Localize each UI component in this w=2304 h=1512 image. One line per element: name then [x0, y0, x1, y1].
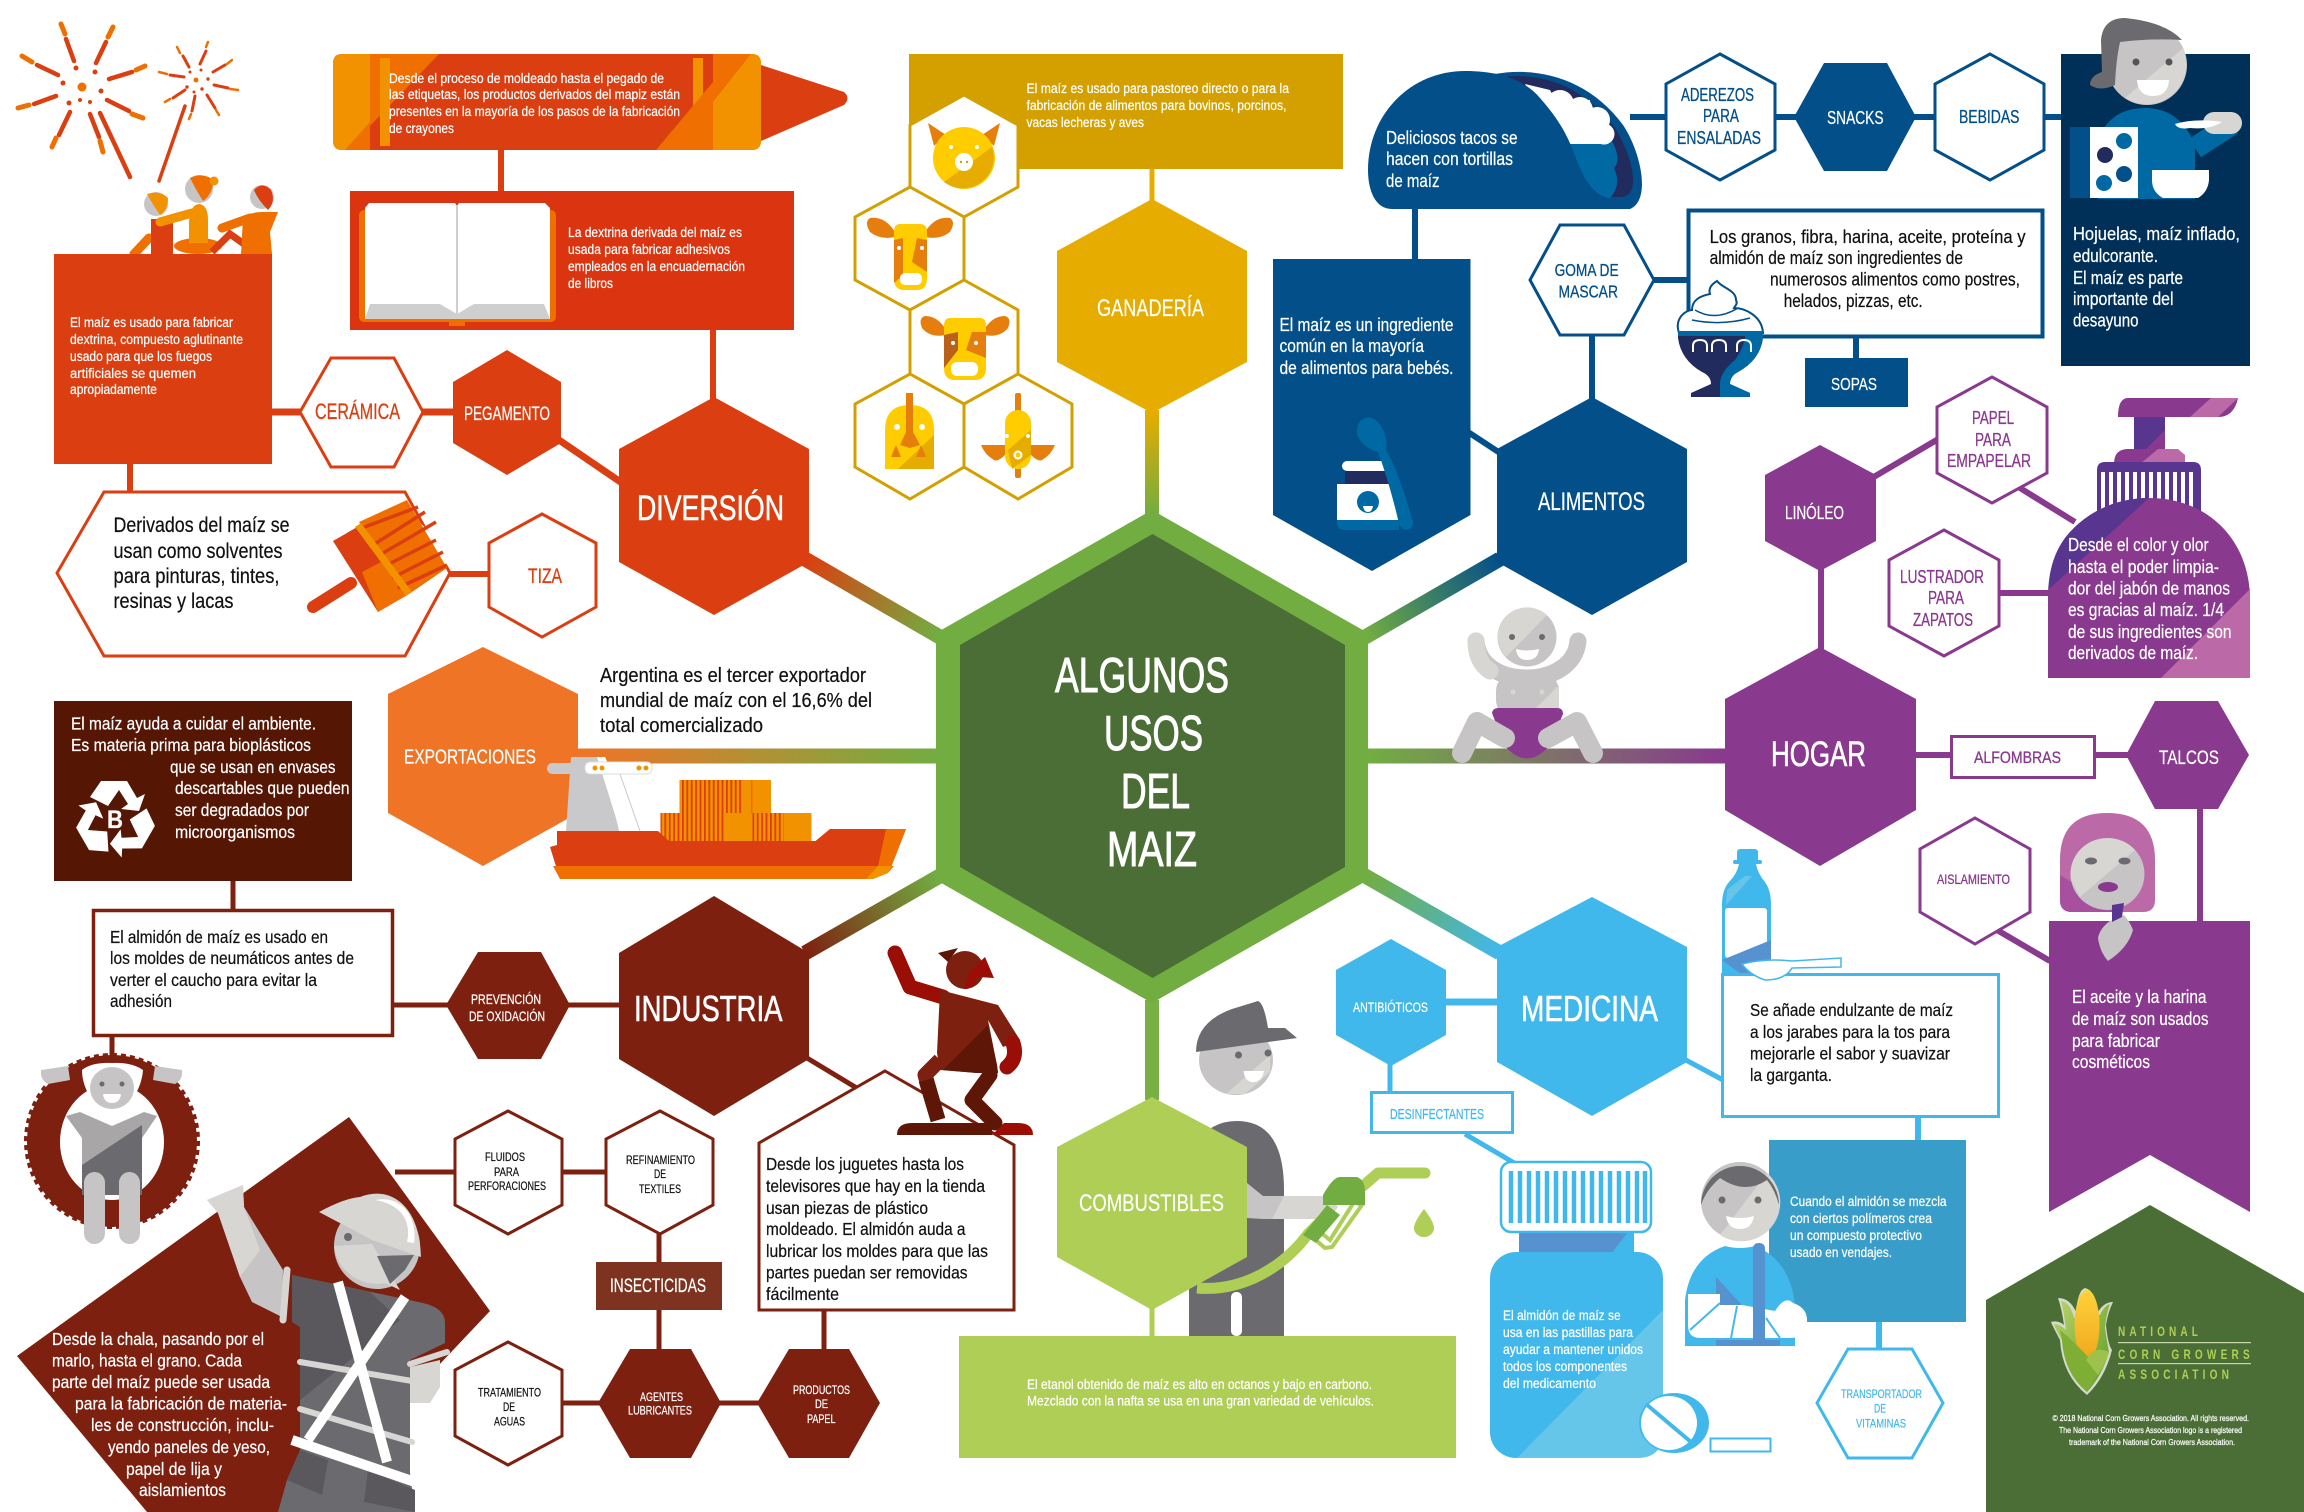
- hexagon: pegamento: PEGAMENTO: [464, 404, 550, 425]
- panel: hand soap: es gracias al maíz. 1/4: [2068, 600, 2224, 620]
- hexagon: agentes lubricantes: AGENTES: [640, 1392, 683, 1404]
- icon: woman with make-up: [2060, 813, 2155, 961]
- central hexagon title: USOS: [1104, 707, 1203, 761]
- hexagon: aderezos para ensaladas: ENSALADAS: [1677, 127, 1761, 148]
- panel: bioplastics: ser degradados por: [175, 800, 309, 820]
- hexagon: exportaciones: [388, 647, 578, 866]
- panel: National Corn Growers Association logo: The National Corn Growers Association logo is a registered: [2059, 1425, 2242, 1435]
- hexagon: productos de papel: [757, 1349, 880, 1458]
- panel: National Corn Growers Association logo: NATIONAL: [2118, 1323, 2198, 1339]
- panel: cough syrup: a los jarabes para la tos para: [1750, 1022, 1950, 1042]
- hexagon: exportaciones: EXPORTACIONES: [404, 746, 536, 768]
- panel: construction materials: para la fabricación de materia-: [75, 1394, 287, 1414]
- panel: National Corn Growers Association logo: [1986, 1205, 2304, 1512]
- panel: alfombras: ALFOMBRAS: [1974, 748, 2061, 767]
- panel: ethanol: Mezclado con la nafta se usa en una gran variedad de vehículos.: [1027, 1394, 1374, 1408]
- panel: alfombras: [1952, 736, 2094, 778]
- panel: ethanol: El etanol obtenido de maíz es alto en octanos y bajo en carbono.: [1027, 1377, 1372, 1392]
- panel: tyre molds: adhesión: [110, 991, 172, 1011]
- hexagon: talcos: [2126, 701, 2249, 809]
- panel: bioplastics: microorganismos: [175, 822, 295, 842]
- panel: crayon: las etiquetas, los productos derivados del mapiz están: [389, 87, 680, 102]
- icon: chicken hexagon 2: [964, 374, 1072, 499]
- panel: fireworks dextrin: usado para que los fuegos: [70, 349, 212, 364]
- panel: hand soap: derivados de maíz.: [2068, 643, 2198, 663]
- text: Argentina exports: total comercializado: [600, 715, 763, 737]
- panel: insecticidas: [596, 1262, 722, 1310]
- hexagon: fluidos para perforaciones: PERFORACIONES: [468, 1181, 546, 1193]
- hexagon: fluidos para perforaciones: FLUIDOS: [485, 1152, 525, 1164]
- panel: ingredients text: Los granos, fibra, harina, aceite, proteína y: [1710, 227, 2026, 247]
- panel: ingredients text: numerosos alimentos como postres,: [1770, 270, 2020, 290]
- hexagon: aderezos para ensaladas: [1666, 54, 1775, 180]
- text: Argentina exports: [600, 665, 872, 737]
- hexagon: ganadería: GANADERÍA: [1097, 295, 1204, 322]
- panel: plastic toys and TVs: partes puedan ser removidas: [766, 1262, 968, 1282]
- panel: book binding: de libros: [568, 276, 613, 291]
- connectors between hexagons and panels: [112, 117, 2200, 1403]
- panel: bioplastics: descartables que pueden: [175, 778, 350, 798]
- panel: pills bottle: [1490, 1162, 1770, 1458]
- hexagon: linóleo: [1765, 445, 1876, 571]
- panel: hand soap: Desde el color y olor: [2068, 535, 2209, 555]
- icon: taco panel: de maíz: [1386, 171, 1440, 191]
- panel: ethanol: [959, 1336, 1456, 1458]
- central hexagon title: ALGUNOS: [1055, 649, 1229, 703]
- hexagon: tiza: [489, 514, 596, 637]
- panel: breakfast: desayuno: [2073, 310, 2138, 330]
- icon: chicken hexagon 1: [855, 374, 964, 499]
- hexagon: transportador de vitaminas: TRANSPORTADOR: [1841, 1387, 1922, 1401]
- hexagon: bebidas: BEBIDAS: [1959, 106, 2020, 127]
- panel: ingredients text: almidón de maíz son ingredientes de: [1710, 248, 1963, 268]
- icon: recycling symbol: B: [107, 806, 123, 834]
- panel: fireworks dextrin: dextrina, compuesto aglutinante: [70, 332, 243, 347]
- hexagon: tiza: TIZA: [528, 565, 562, 588]
- icon: baby: [1462, 608, 1593, 758]
- panel: construction materials: yendo paneles de yeso,: [108, 1437, 270, 1457]
- panel: solvents: para pinturas, tintes,: [114, 565, 280, 588]
- hexagon: refinamiento de textiles: TEXTILES: [639, 1184, 681, 1196]
- hexagon: hogar: [1725, 647, 1916, 866]
- hexagon: tratamiento de aguas: AGUAS: [494, 1417, 525, 1429]
- panel: breakfast: importante del: [2073, 289, 2174, 309]
- panel: cosmetics: de maíz son usados: [2072, 1009, 2208, 1029]
- hexagon: alimentos: [1497, 397, 1687, 615]
- panel: fireworks dextrin: artificiales se quemen: [70, 366, 196, 381]
- panel: National Corn Growers Association logo: trademark of the National Corn Growers Association.: [2069, 1437, 2235, 1447]
- hexagon: prevención de oxidación: PREVENCIÓN: [471, 991, 541, 1007]
- icon: soap dispenser pump: [2097, 398, 2238, 515]
- hexagon: hogar: HOGAR: [1771, 735, 1866, 774]
- panel: insecticidas: INSECTICIDAS: [610, 1276, 706, 1297]
- panel: tyre molds: verter el caucho para evitar la: [110, 970, 317, 990]
- panel: bandages: usado en vendajes.: [1790, 1245, 1892, 1260]
- panel: cough syrup: la garganta.: [1750, 1065, 1832, 1085]
- icon: fuel attendant: [1189, 1001, 1297, 1336]
- icon: child on tyre swing: [26, 1055, 198, 1244]
- panel: crayon: de crayones: [389, 121, 454, 136]
- hexagon: transportador de vitaminas: DE: [1874, 1402, 1886, 1416]
- panel: tyre molds: los moldes de neumáticos antes de: [110, 948, 354, 968]
- panel: fireworks dextrin: apropiadamente: [70, 382, 157, 397]
- panel: solvents: resinas y lacas: [114, 590, 234, 613]
- panel: construction materials: [17, 1117, 490, 1512]
- hexagon: lustrador para zapatos: ZAPATOS: [1913, 610, 1973, 630]
- panel: construction materials: marlo, hasta el grano. Cada: [52, 1351, 242, 1371]
- panel: cough syrup: Se añade endulzante de maíz: [1750, 1000, 1953, 1020]
- icon: bottle cap: [1501, 1162, 1651, 1232]
- panel: ganadería text: vacas lecheras y aves: [1026, 115, 1144, 130]
- hexagon: refinamiento de textiles: REFINAMIENTO: [626, 1155, 695, 1167]
- panel: bandages: un compuesto protectivo: [1790, 1228, 1922, 1243]
- hexagon: prevención de oxidación: DE OXIDACIÓN: [469, 1008, 545, 1024]
- hexagon: papel para empapelar: PARA: [1975, 430, 2011, 450]
- panel: plastic toys and TVs: moldeado. El almidón auda a: [766, 1219, 966, 1239]
- panel: hand soap: hasta el poder limpia-: [2068, 557, 2219, 577]
- panel: bioplastics: [54, 701, 352, 881]
- hexagon: goma de mascar: [1530, 225, 1654, 335]
- hexagon: lustrador para zapatos: LUSTRADOR: [1900, 567, 1984, 587]
- hexagon: talcos: TALCOS: [2159, 748, 2219, 769]
- panel: cosmetics: para fabricar: [2072, 1031, 2160, 1051]
- hexagon: cerámica: [300, 358, 423, 467]
- panel: bandages: Cuando el almidón se mezcla: [1790, 1194, 1947, 1209]
- central hexagon title: MAIZ: [1107, 823, 1197, 877]
- panel: sopas: [1805, 358, 1908, 407]
- panel: baby food: común en la mayoría: [1280, 336, 1425, 356]
- panel: pills bottle: del medicamento: [1503, 1376, 1596, 1391]
- panel: book binding: empleados en la encuadernación: [568, 259, 745, 274]
- panel: cough syrup: mejorarle el sabor y suavizar: [1750, 1044, 1950, 1064]
- hexagon: aislamiento: AISLAMIENTO: [1937, 871, 2010, 887]
- panel: book binding: La dextrina derivada del maíz es: [568, 225, 742, 240]
- panel: plastic toys and TVs: usan piezas de plástico: [766, 1198, 928, 1218]
- panel: solvents: [57, 492, 450, 656]
- hexagon: refinamiento de textiles: [606, 1111, 713, 1234]
- icon: taco panel: Deliciosos tacos se: [1386, 128, 1518, 148]
- hexagon: industria: [619, 896, 809, 1116]
- hexagon: productos de papel: PRODUCTOS: [793, 1385, 850, 1397]
- panel: baby food: [1273, 259, 1470, 571]
- hexagon: prevención de oxidación: [446, 952, 570, 1059]
- hexagon: papel para empapelar: EMPAPELAR: [1947, 451, 2031, 471]
- panel: cosmetics: [2049, 813, 2250, 1212]
- panel: construction materials: les de construcción, inclu-: [91, 1415, 274, 1435]
- hexagon: tratamiento de aguas: TRATAMIENTO: [478, 1388, 541, 1400]
- hexagon: diversión: [619, 397, 809, 615]
- panel: baby food: El maíz es un ingrediente: [1280, 315, 1454, 335]
- panel: tyre molds: [94, 910, 392, 1036]
- panel: breakfast: edulcorante.: [2073, 246, 2158, 266]
- icon: taco panel: [1368, 71, 1642, 209]
- panel: construction materials: Desde la chala, pasando por el: [52, 1329, 264, 1349]
- panel: hand soap: de sus ingredientes son: [2068, 622, 2232, 642]
- panel: solvents: usan como solventes: [114, 540, 282, 563]
- icon: fuel nozzle and hose: [1197, 1173, 1434, 1288]
- hexagon: productos de papel: PAPEL: [807, 1414, 836, 1426]
- hexagon: lustrador para zapatos: [1889, 530, 1999, 656]
- hexagon: tratamiento de aguas: [455, 1342, 562, 1465]
- panel: baby food: de alimentos para bebés.: [1280, 358, 1454, 378]
- panel: plastic toys and TVs: lubricar los moldes para que las: [766, 1241, 988, 1261]
- icon: taco panel: hacen con tortillas: [1386, 149, 1513, 169]
- hexagon: productos de papel: DE: [815, 1399, 828, 1411]
- icon: fireworks: [18, 24, 238, 181]
- hexagon: medicina: [1497, 897, 1687, 1116]
- hexagon: antibióticos: ANTIBIÓTICOS: [1353, 999, 1428, 1015]
- hexagon: fluidos para perforaciones: PARA: [494, 1167, 519, 1179]
- panel: bioplastics: que se usan en envases: [170, 757, 336, 777]
- panel: sopas: SOPAS: [1831, 374, 1877, 394]
- panel: construction materials: aislamientos: [139, 1480, 226, 1500]
- icon: pill: [1639, 1393, 1770, 1453]
- hexagon: pegamento: [453, 350, 561, 475]
- icon: pig hexagon: [910, 95, 1018, 217]
- hexagon: combustibles: [1057, 1097, 1247, 1310]
- panel: ingredients text: helados, pizzas, etc.: [1784, 291, 1923, 311]
- panel: bandages: con ciertos polímeros crea: [1790, 1211, 1932, 1226]
- panel: hand soap: dor del jabón de manos: [2068, 578, 2230, 598]
- hexagon: snacks: [1794, 63, 1916, 171]
- panel: cough syrup: [1722, 958, 1998, 1116]
- hexagon: combustibles: COMBUSTIBLES: [1079, 1190, 1224, 1217]
- panel: bioplastics: Es materia prima para bioplásticos: [71, 735, 311, 755]
- panel: hand soap: [2048, 398, 2250, 678]
- panel: bioplastics: El maíz ayuda a cuidar el ambiente.: [71, 714, 316, 734]
- icon: ice cream sundae: [1678, 281, 1763, 397]
- hexagon: bebidas: [1935, 54, 2044, 180]
- panel: pills bottle: ayudar a mantener unidos: [1503, 1342, 1643, 1357]
- hexagon: papel para empapelar: [1937, 377, 2047, 503]
- icon: corn cob: [2051, 1288, 2113, 1395]
- hexagon: transportador de vitaminas: VITAMINAS: [1856, 1416, 1906, 1430]
- panel: ganadería text: El maíz es usado para pastoreo directo o para la: [1026, 81, 1289, 96]
- hexagon: ganadería: [1057, 199, 1247, 413]
- hexagon: goma de mascar: MASCAR: [1558, 282, 1618, 302]
- hexagon: alimentos: ALIMENTOS: [1538, 488, 1645, 516]
- hexagon: aislamiento: [1920, 818, 2030, 944]
- panel: desinfectantes: [1372, 1092, 1512, 1132]
- hexagon: transportador de vitaminas: [1817, 1349, 1943, 1458]
- panel: crayon: Desde el proceso de moldeado hasta el pegado de: [389, 71, 664, 86]
- icon: man on skateboard: [895, 948, 1033, 1135]
- panel: plastic toys and TVs: fácilmente: [766, 1284, 839, 1304]
- hexagon: goma de mascar: GOMA DE: [1555, 260, 1619, 280]
- panel: cosmetics: cosméticos: [2072, 1052, 2150, 1072]
- panel: construction materials: parte del maíz puede ser usada: [52, 1372, 270, 1392]
- panel: crayon: [333, 54, 848, 150]
- hexagon: tratamiento de aguas: DE: [503, 1402, 515, 1414]
- hexagon: diversión: DIVERSIÓN: [637, 488, 784, 528]
- panel: ganadería text: fabricación de alimentos para bovinos, porcinos,: [1026, 98, 1286, 113]
- hexagon: lustrador para zapatos: PARA: [1928, 588, 1964, 608]
- icon: syrup bottle: [1722, 849, 1771, 977]
- icon: paint brush: [313, 500, 450, 612]
- icon: baby food jar and spoon: [1337, 418, 1413, 530]
- hexagon: medicina: MEDICINA: [1521, 988, 1658, 1029]
- icon: cow hexagon 1: [855, 187, 964, 310]
- panel: fireworks dextrin: El maíz es usado para fabricar: [70, 315, 233, 330]
- central hexagon title: DEL: [1121, 765, 1190, 819]
- panel: breakfast: [2061, 18, 2250, 366]
- hexagon: snacks: SNACKS: [1827, 107, 1884, 128]
- panel: breakfast: El maíz es parte: [2073, 268, 2183, 288]
- icon: cargo ship: [547, 757, 906, 879]
- hexagon: cerámica: CERÁMICA: [315, 399, 400, 424]
- hexagon: fluidos para perforaciones: [455, 1111, 562, 1234]
- panel: plastic toys and TVs: Desde los juguetes hasta los: [766, 1154, 964, 1174]
- panel: pills bottle: El almidón de maíz se: [1503, 1308, 1621, 1323]
- icon: woman eating cereal: [2070, 18, 2242, 199]
- panel: pills bottle: todos los componentes: [1503, 1359, 1627, 1374]
- panel: pills bottle: usa en las pastillas para: [1503, 1325, 1633, 1340]
- panel: tyre molds: El almidón de maíz es usado en: [110, 927, 328, 947]
- central hexagon title: [936, 510, 1368, 1003]
- panel: plastic toys and TVs: [759, 1071, 1014, 1310]
- hexagon: aderezos para ensaladas: ADEREZOS: [1681, 84, 1754, 105]
- hexagon: antibióticos: [1336, 939, 1446, 1066]
- panel: National Corn Growers Association logo: © 2018 National Corn Growers Association. All rights reserved.: [2052, 1413, 2249, 1423]
- icon: boy with cast: [1685, 1162, 1807, 1346]
- panel: ganadería text: [909, 54, 1343, 169]
- icon: cow hexagon 2: [910, 280, 1018, 404]
- panel: plastic toys and TVs: televisores que hay en la tienda: [766, 1176, 985, 1196]
- icon: construction worker: [207, 1185, 447, 1512]
- icon: children watching fireworks: [134, 175, 278, 255]
- hexagon: papel para empapelar: PAPEL: [1972, 408, 2014, 428]
- icon: recycling symbol: [67, 781, 160, 864]
- panel: crayon: presentes en la mayoría de los pasos de la fabricación: [389, 104, 680, 119]
- panel: desinfectantes: DESINFECTANTES: [1390, 1107, 1484, 1123]
- panel: National Corn Growers Association logo: CORN GROWERS: [2118, 1346, 2250, 1362]
- hexagon: agentes lubricantes: LUBRICANTES: [628, 1406, 692, 1418]
- panel: book binding: usada para fabricar adhesivos: [568, 242, 730, 257]
- text: Argentina exports: mundial de maíz con el 16,6% del: [600, 690, 872, 712]
- hexagon: linóleo: LINÓLEO: [1785, 502, 1844, 523]
- icon: open book: [359, 203, 556, 326]
- panel: book binding: [350, 191, 794, 330]
- text: Argentina exports: Argentina es el tercer exportador: [600, 665, 866, 687]
- icon: syrup spoon: [1742, 958, 1841, 980]
- panel: construction materials: papel de lija y: [126, 1459, 222, 1479]
- panel: National Corn Growers Association logo: ASSOCIATION: [2118, 1366, 2229, 1382]
- panel: ingredients text: [1688, 210, 2042, 336]
- hexagon: agentes lubricantes: [598, 1349, 721, 1458]
- panel: fireworks dextrin: [54, 254, 272, 464]
- hexagon: refinamiento de textiles: DE: [654, 1169, 666, 1181]
- panel: solvents: Derivados del maíz se: [114, 514, 290, 537]
- panel: cosmetics: El aceite y la harina: [2072, 987, 2207, 1007]
- panel: bandages: [1685, 1140, 1966, 1346]
- hexagon: industria: INDUSTRIA: [634, 988, 782, 1029]
- panel: breakfast: Hojuelas, maíz inflado,: [2073, 224, 2240, 244]
- hexagon: aderezos para ensaladas: PARA: [1703, 105, 1739, 126]
